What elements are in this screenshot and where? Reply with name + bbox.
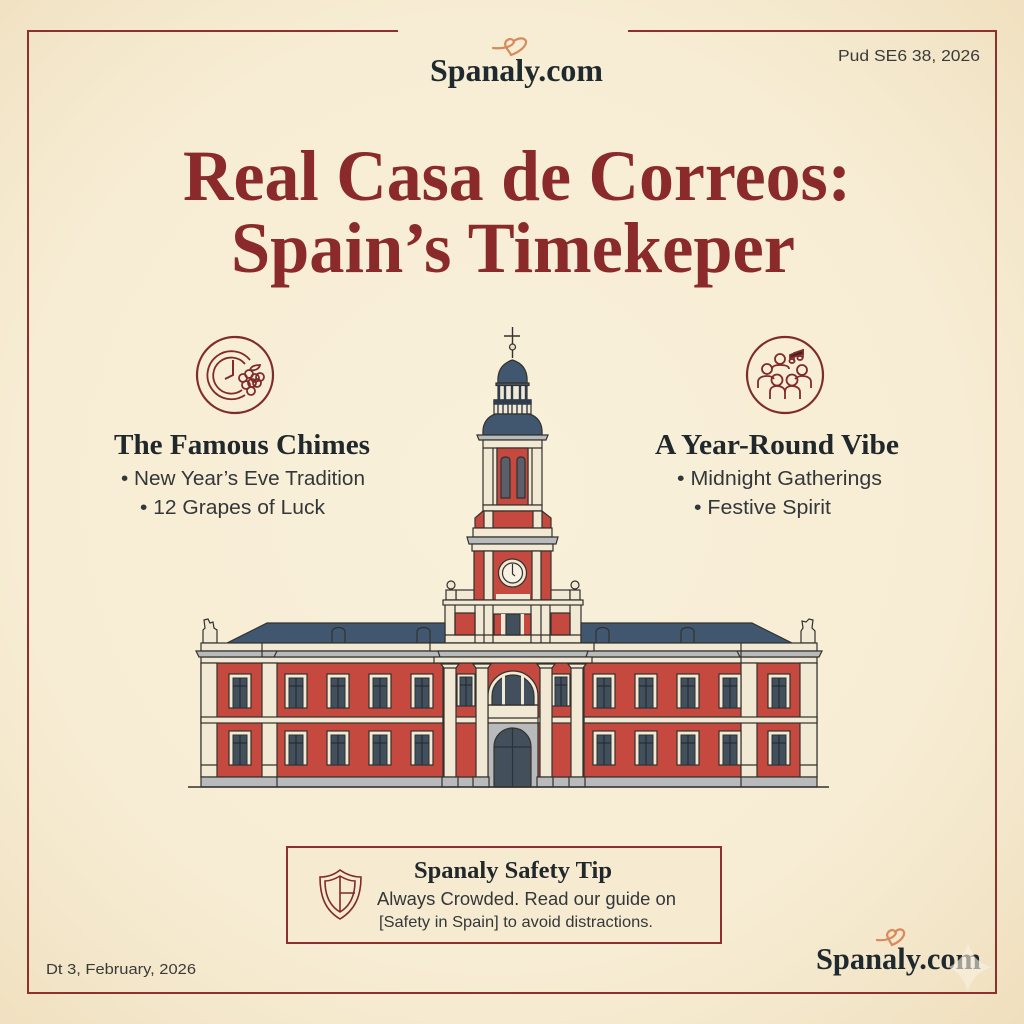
tower base <box>445 600 581 643</box>
capitals <box>441 664 459 668</box>
logo wordmark: Spanaly.com <box>430 52 603 88</box>
right pilasters <box>741 663 757 777</box>
building illustration <box>188 327 829 787</box>
date bottom left: Dt 3, February, 2026 <box>46 962 196 978</box>
cross finial <box>504 327 520 358</box>
bullet list <box>121 468 365 519</box>
panel: a year-round vibe <box>655 337 899 519</box>
icon: shield <box>320 870 361 919</box>
pedestals <box>442 777 458 787</box>
lower dome <box>483 414 542 435</box>
plinth <box>201 777 817 787</box>
left roof <box>203 619 445 643</box>
tip text: [Safety in Spain] to avoid distractions. <box>379 914 653 931</box>
string course <box>201 717 817 723</box>
ground line <box>188 786 829 788</box>
publication date top right: Pud SE6 38, 2026 <box>838 48 980 65</box>
title: Spain’s Timekeper <box>231 208 795 288</box>
tower <box>443 327 583 643</box>
tip text: Always Crowded. Read our guide on <box>377 889 676 909</box>
logo squiggle mark <box>877 929 904 945</box>
bullet list <box>677 468 882 519</box>
right roof <box>581 619 815 643</box>
right chimney <box>801 619 815 643</box>
icon: clock face <box>498 559 526 587</box>
windows upper row <box>229 674 790 708</box>
title: Real Casa de Correos: <box>183 136 851 216</box>
belfry <box>483 440 542 505</box>
sparkle overlay <box>948 943 992 992</box>
lantern <box>498 360 527 383</box>
bottom logo <box>816 929 992 992</box>
columns <box>444 667 456 777</box>
heading: A Year-Round Vibe <box>655 430 899 461</box>
left pilasters <box>201 663 217 777</box>
tip text <box>377 889 676 931</box>
central portico <box>430 643 594 787</box>
arched window <box>488 671 538 723</box>
panel: the famous chimes <box>114 337 370 519</box>
portico side windows <box>457 674 475 706</box>
bullet list: • New Year’s Eve Tradition <box>121 468 365 490</box>
left chimney <box>203 619 217 643</box>
logo wordmark: Spanaly.com <box>816 941 981 976</box>
title <box>183 136 851 288</box>
side balustrades <box>456 590 475 600</box>
heading: The Famous Chimes <box>114 430 370 461</box>
door surround <box>488 723 538 787</box>
logo squiggle mark <box>493 38 526 55</box>
clock stage <box>474 551 551 600</box>
door <box>494 728 531 787</box>
bullet list: • Midnight Gatherings <box>677 468 882 490</box>
bullet list: • 12 Grapes of Luck <box>140 497 326 519</box>
top logo <box>430 38 603 88</box>
cornice <box>196 651 822 657</box>
callout: safety tip <box>287 847 721 943</box>
bullet list: • Festive Spirit <box>694 497 831 519</box>
windows lower row <box>229 731 790 765</box>
icon: crowd with music note <box>747 337 823 413</box>
tip heading: Spanaly Safety Tip <box>414 858 612 884</box>
icon: clock and grapes <box>197 337 273 413</box>
main facade walls <box>196 643 822 787</box>
